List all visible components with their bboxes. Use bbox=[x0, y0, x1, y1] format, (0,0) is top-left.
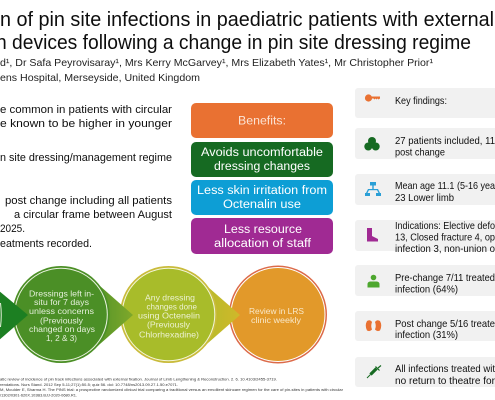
benefits heading box: Benefits: bbox=[238, 116, 286, 128]
benefit: avoids dressing changes: Avoids uncomfortable bbox=[201, 147, 323, 159]
title: n of pin site infections in paediatric patients with external bbox=[0, 9, 494, 31]
step: octenelin dressing changes bbox=[120, 266, 217, 363]
references: atic review of incidence of pin track infections associated with external fixation. Journal of Limb Lengthening & Reconstruction. 2. 6. 10.4103/2455-3719. bbox=[0, 378, 277, 382]
step: octenelin dressing changes: Chlorhexadine) bbox=[139, 330, 199, 340]
authors and affiliation bbox=[0, 58, 434, 84]
authors and affiliation: d¹, Dr Safa Peyrovisaray¹, Mrs Kerry McGarvey¹, Mrs Elizabeth Yates¹, Mr Christopher Prior¹ bbox=[0, 58, 434, 69]
arrow: third step bbox=[200, 280, 240, 350]
authors and affiliation: ens Hospital, Merseyside, United Kingdom bbox=[0, 73, 200, 84]
step: dressings left in situ: (Previously bbox=[40, 316, 83, 326]
benefit: less skin irritation bbox=[191, 180, 333, 215]
finding: treatment outcome bbox=[355, 357, 495, 387]
benefit: avoids dressing changes: dressing changes bbox=[214, 161, 310, 173]
text block: background and methods: 2025. bbox=[0, 223, 25, 235]
step: octenelin dressing changes: Any dressing bbox=[145, 294, 195, 302]
benefit: avoids dressing changes bbox=[191, 142, 333, 177]
step: dressings left in situ: Dressings left in- bbox=[29, 290, 94, 298]
text block: background and methods: eatments recorded. bbox=[0, 238, 92, 250]
title bbox=[0, 9, 494, 54]
benefit: less skin irritation: Octenalin use bbox=[223, 199, 301, 211]
text block: background and methods: a circular frame between August bbox=[14, 209, 172, 221]
step: review in clinic: Review in LRS bbox=[249, 307, 304, 316]
panel: key findings bbox=[355, 88, 495, 387]
icon: biohazard bbox=[364, 137, 380, 150]
step: octenelin dressing changes: (Previously bbox=[147, 320, 190, 330]
finding: pre-change infections bbox=[355, 265, 495, 296]
title: n devices following a change in pin site dressing regime bbox=[0, 32, 471, 54]
step: review in clinic: clinic weekly bbox=[251, 316, 301, 325]
references: rendations. Nurs Stand. 2012 Sep 5-11;27(1):50-5; quiz 56. doi: 10.7748/ns2013.09.27.1.50.e7071. bbox=[0, 383, 178, 387]
references: M, Moulder E, Sharma H. The PINS trial: a prospective randomized clinical trial comparing a traditional versus an emollient skincare regimen for the care of pin-sites in patients with circular bbox=[0, 388, 344, 392]
finding: mean age bbox=[355, 174, 495, 205]
step: dressings left in situ bbox=[12, 266, 110, 363]
text block: background and methods: e known to be higher in younger bbox=[0, 118, 172, 130]
panel: benefits bbox=[191, 103, 333, 254]
icon: key bbox=[365, 94, 380, 102]
finding: patients included bbox=[355, 128, 495, 159]
step: dressings left in situ: changed on days bbox=[29, 325, 95, 334]
finding: treatment outcome: no return to theatre for bbox=[395, 376, 495, 387]
step: review in clinic bbox=[229, 266, 327, 364]
finding: pre-change infections: infection (64%) bbox=[395, 284, 458, 296]
references bbox=[0, 378, 344, 398]
text block: background and methods: n site dressing/management regime bbox=[0, 152, 172, 164]
finding: post-change infections bbox=[355, 311, 495, 341]
finding: mean age: 23 Lower limb bbox=[395, 193, 454, 204]
benefits heading box bbox=[191, 103, 333, 138]
finding: patients included: post change bbox=[395, 148, 445, 158]
text block: background and methods: e common in patients with circular bbox=[0, 104, 172, 116]
icon: boot bbox=[367, 228, 378, 242]
previous step edge bbox=[0, 303, 2, 327]
benefit: less resource allocation: allocation of staff bbox=[214, 238, 312, 250]
arrow: first step bbox=[0, 290, 28, 341]
text block: background and methods bbox=[0, 104, 173, 250]
step: dressings left in situ: unless concerns bbox=[29, 307, 94, 316]
step: dressings left in situ: situ for 7 days bbox=[34, 298, 89, 307]
icon: person bbox=[368, 275, 380, 288]
references: /1302/0301-620X.103B3.BJJ-2020-0680.R1. bbox=[0, 394, 77, 398]
finding: key findings heading bbox=[355, 88, 495, 118]
step: octenelin dressing changes: changes done bbox=[146, 302, 197, 312]
benefit: less resource allocation: Less resource bbox=[224, 224, 302, 236]
step: dressings left in situ: 1, 2 & 3) bbox=[46, 334, 77, 343]
icon: syringe bbox=[367, 366, 381, 378]
process flow bbox=[0, 266, 327, 364]
benefit: less skin irritation: Less skin irritation from bbox=[197, 185, 327, 197]
finding: post-change infections: infection (31%) bbox=[395, 330, 458, 341]
text block: background and methods: post change including all patients bbox=[5, 195, 173, 207]
benefit: less resource allocation bbox=[191, 218, 333, 254]
step: octenelin dressing changes: using Octenelin bbox=[138, 312, 200, 320]
finding: key findings heading: Key findings: bbox=[395, 96, 447, 107]
icon: kidneys bbox=[366, 320, 381, 331]
finding: indications bbox=[355, 220, 495, 255]
icon: hierarchy bbox=[365, 182, 381, 196]
arrow: second step bbox=[92, 279, 133, 351]
